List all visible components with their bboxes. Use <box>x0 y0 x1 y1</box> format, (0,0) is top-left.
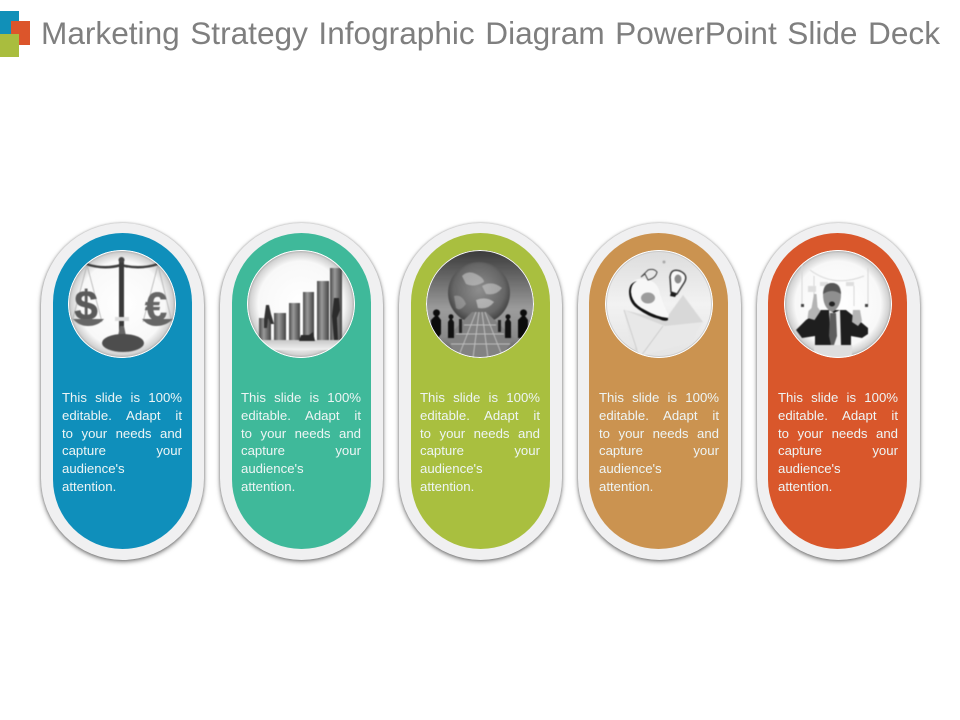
text block: capture your <box>778 443 898 458</box>
text block: attention. <box>778 479 832 494</box>
text block <box>778 390 898 494</box>
panel: card 4 tan <box>574 221 744 566</box>
text block: capture your <box>599 443 719 458</box>
icon: balance scale with dollar and euro <box>68 250 176 358</box>
text block: audience's <box>599 461 662 476</box>
icon: globe with silhouettes and grid floor <box>426 250 534 358</box>
panel: card 1 blue <box>38 221 208 566</box>
text block: editable. Adapt it <box>62 408 182 423</box>
panel: card 5 orange <box>754 221 924 566</box>
text block: This slide is 100% <box>599 390 719 405</box>
title: Marketing Strategy Infographic Diagram PowerPoint Slide Deck <box>41 15 940 51</box>
text block: attention. <box>241 479 295 494</box>
text block: attention. <box>599 479 653 494</box>
text block: to your needs and <box>62 426 182 441</box>
text block: attention. <box>420 479 474 494</box>
text block: to your needs and <box>599 426 719 441</box>
text block: to your needs and <box>778 426 898 441</box>
text block <box>241 390 361 494</box>
text block: This slide is 100% <box>778 390 898 405</box>
icon: bar chart with climbers <box>247 250 355 358</box>
text block: editable. Adapt it <box>241 408 361 423</box>
text block: This slide is 100% <box>62 390 182 405</box>
icon: light bulbs and envelope <box>605 250 713 358</box>
text block: This slide is 100% <box>241 390 361 405</box>
text block: to your needs and <box>241 426 361 441</box>
text block: audience's <box>420 461 483 476</box>
panel: card 2 green <box>216 221 386 566</box>
icon: balance scale with dollar and euro: € <box>145 285 167 329</box>
text block: capture your <box>241 443 361 458</box>
text block: audience's <box>241 461 304 476</box>
icon: businessman presenting <box>784 250 892 358</box>
text block: editable. Adapt it <box>599 408 719 423</box>
text block: editable. Adapt it <box>778 408 898 423</box>
text block: editable. Adapt it <box>420 408 540 423</box>
text block: capture your <box>62 443 182 458</box>
text block: This slide is 100% <box>420 390 540 405</box>
text block: audience's <box>778 461 841 476</box>
text block: attention. <box>62 479 116 494</box>
logo icon <box>0 11 30 57</box>
text block <box>420 390 540 494</box>
text block: capture your <box>420 443 540 458</box>
text block: audience's <box>62 461 125 476</box>
text block: to your needs and <box>420 426 540 441</box>
panel: card 3 lime <box>396 221 566 566</box>
text block <box>599 390 719 494</box>
text block <box>62 390 182 494</box>
icon: balance scale with dollar and euro: $ <box>74 282 98 329</box>
